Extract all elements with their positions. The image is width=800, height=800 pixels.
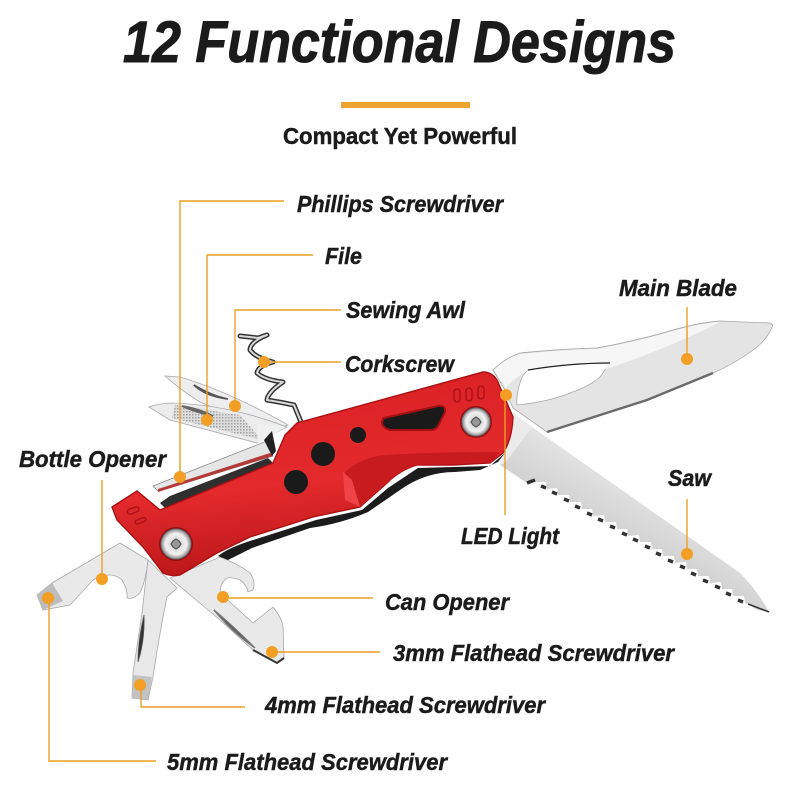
rear screw xyxy=(460,406,492,438)
callout: Sewing Awl xyxy=(229,297,466,412)
main blade xyxy=(493,321,773,432)
saw blade xyxy=(500,413,769,612)
callout: LED Light: LED Light xyxy=(461,523,560,549)
callout: Main Blade xyxy=(619,275,737,365)
front screw xyxy=(159,527,193,561)
corkscrew tool xyxy=(240,335,301,422)
callout: Can Opener xyxy=(217,589,510,615)
black under-frame xyxy=(218,453,505,560)
callout: 4mm Flathead Screwdriver xyxy=(134,679,546,718)
callout: Can Opener: Can Opener xyxy=(385,589,510,615)
callout: 5mm Flathead Screwdriver xyxy=(42,592,448,775)
callout: Phillips Screwdriver: Phillips Screwdriver xyxy=(297,191,504,217)
callout: Phillips Screwdriver xyxy=(174,191,504,483)
callout: Corkscrew: Corkscrew xyxy=(345,351,456,377)
orange accent bar xyxy=(341,102,470,108)
can opener and 3mm flathead tool xyxy=(170,557,284,663)
red handle xyxy=(112,372,513,576)
callout: Sewing Awl: Sewing Awl xyxy=(346,297,466,323)
callout: 5mm Flathead Screwdriver: 5mm Flathead Screwdriver xyxy=(167,749,448,775)
sewing awl tool xyxy=(165,376,288,431)
callout: 3mm Flathead Screwdriver: 3mm Flathead Screwdriver xyxy=(393,640,675,666)
callout: Saw xyxy=(668,465,713,560)
4mm flathead tool xyxy=(132,560,177,700)
file tool xyxy=(149,403,287,443)
title: 12 Functional Designs xyxy=(123,10,676,75)
callout: File xyxy=(201,243,362,426)
callout: Bottle Opener xyxy=(19,446,167,585)
callout: Corkscrew xyxy=(258,351,456,377)
phillips screwdriver tool xyxy=(153,431,276,508)
vent slots bottom xyxy=(127,506,146,525)
multi-tool illustration xyxy=(37,321,773,700)
LED window xyxy=(382,406,445,430)
bottle opener and 5mm flathead tool xyxy=(37,543,148,610)
subtitle: Compact Yet Powerful xyxy=(283,123,517,149)
vent slots top xyxy=(454,386,484,402)
callout: 4mm Flathead Screwdriver: 4mm Flathead Screwdriver xyxy=(264,692,546,718)
callout: Bottle Opener: Bottle Opener xyxy=(19,446,167,472)
handle black dots xyxy=(284,470,308,494)
callout: Main Blade: Main Blade xyxy=(619,275,737,301)
callout: Saw: Saw xyxy=(668,465,713,491)
callout: File: File xyxy=(325,243,362,269)
callout: 3mm Flathead Screwdriver xyxy=(266,640,675,666)
callout: LED Light xyxy=(461,389,560,549)
